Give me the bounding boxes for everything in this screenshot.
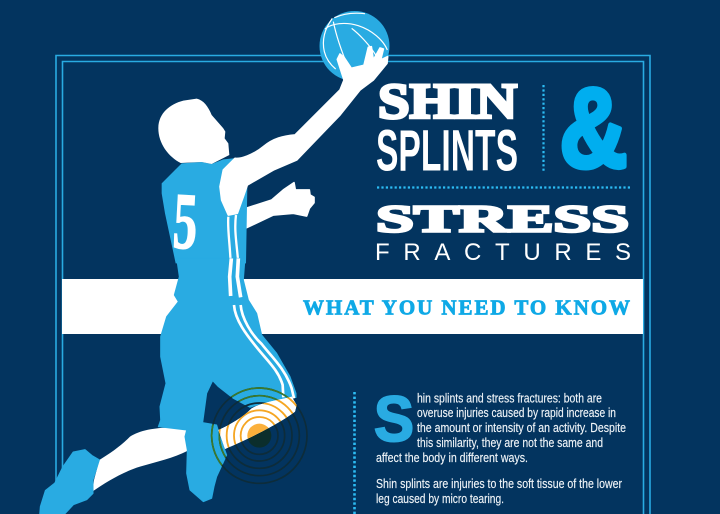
raised arm and hand — [220, 47, 388, 215]
player silhouette — [40, 47, 388, 514]
intro text: hin splints and stress fractures: both are — [417, 390, 602, 406]
intro text: the amount or intensity of an activity. Despite — [417, 420, 626, 435]
shorts stripes — [230, 258, 294, 398]
word: stress: STRESS — [376, 198, 629, 240]
intro text: Shin splints are injuries to the soft tissue of the lower — [376, 476, 623, 491]
jersey — [162, 158, 247, 263]
white banner — [62, 279, 643, 334]
lower leg shin — [218, 397, 297, 449]
back arm and hand — [246, 183, 314, 228]
intro drop cap: S — [374, 383, 414, 455]
jersey number: 5 — [171, 178, 200, 267]
banner heading: WHAT YOU NEED TO KNOW — [303, 296, 630, 320]
intro text: affect the body in different ways. — [376, 450, 528, 465]
word: shin: SHIN — [378, 72, 517, 128]
horizontal dotted divider — [377, 186, 631, 189]
shorts and front leg — [158, 258, 296, 502]
double line frame — [56, 56, 650, 514]
player upper body — [158, 47, 388, 267]
jersey stripes — [228, 215, 238, 263]
rear shoe — [40, 450, 99, 514]
pain target rings — [210, 388, 307, 483]
intro text: overuse injuries caused by rapid increase in — [417, 405, 616, 420]
head — [158, 99, 229, 164]
intro text: this similarity, they are not the same and — [417, 435, 603, 450]
intro text — [376, 390, 626, 506]
title: shin splints — [376, 72, 518, 184]
rear leg — [93, 428, 188, 491]
body text dotted rule — [353, 392, 356, 514]
basketball — [320, 11, 390, 81]
word: fractures: FRACTURES — [375, 239, 631, 266]
ampersand: & — [560, 65, 628, 191]
vertical dotted divider — [542, 85, 545, 172]
word: splints: SPLINTS — [376, 118, 518, 184]
player lower body — [40, 258, 307, 514]
title: stress fractures — [375, 198, 631, 266]
intro text: leg caused by micro tearing. — [376, 491, 504, 506]
